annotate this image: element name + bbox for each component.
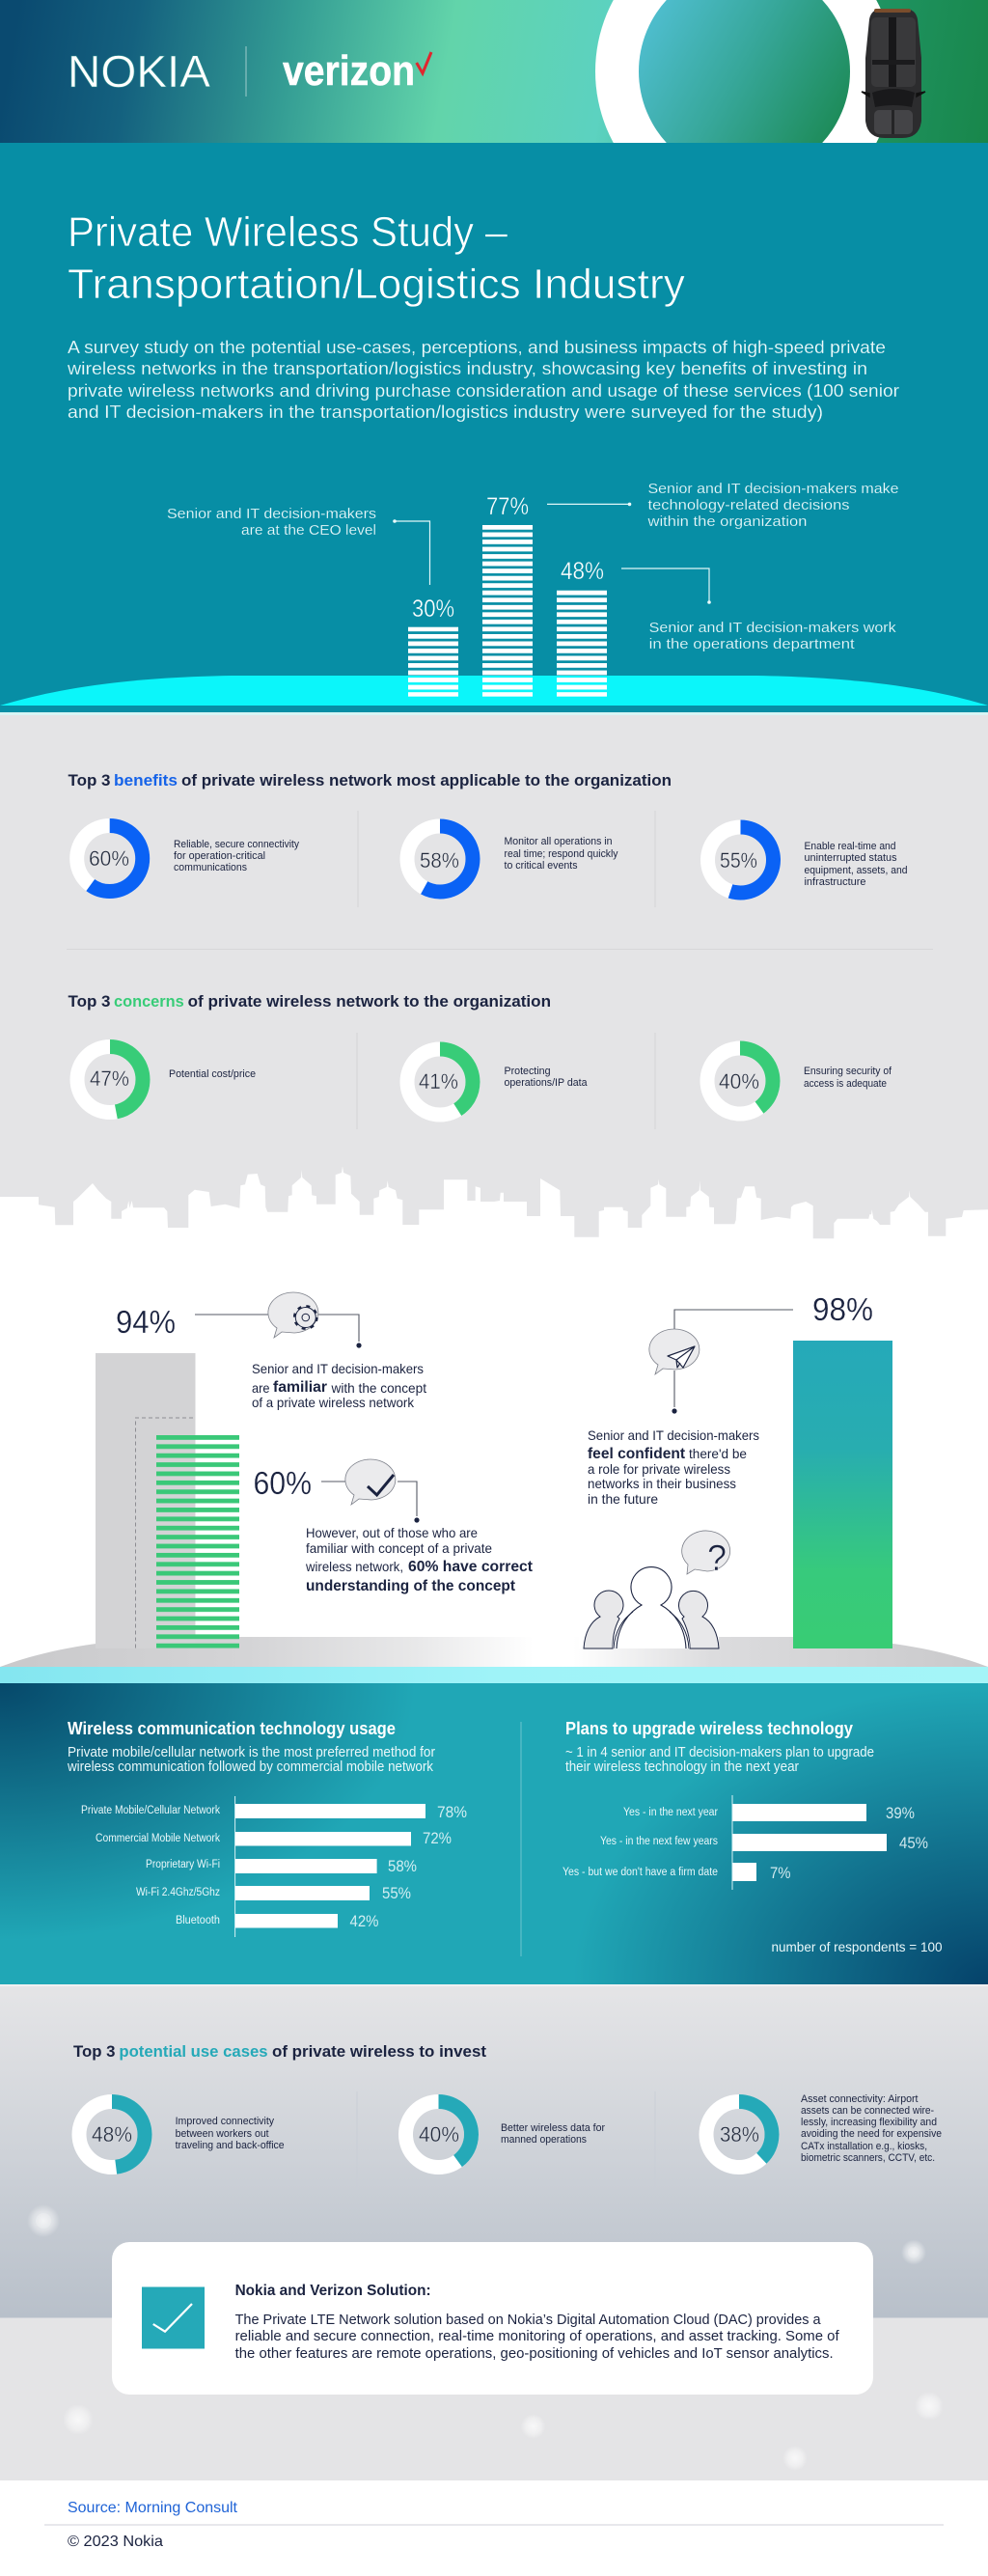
bar chart: technology usage: 72%	[423, 1829, 452, 1847]
text: confident: there'd be	[689, 1446, 747, 1461]
stat: 98%: 98%	[812, 1291, 873, 1327]
donut: 58%	[407, 826, 473, 892]
text: understanding	[305, 1525, 534, 1594]
bar chart: technology usage: 55%	[382, 1884, 411, 1902]
decorative glows	[27, 2204, 944, 2471]
text: cost: Potential cost/price	[169, 1068, 256, 1080]
bar chart: roles: 30%	[412, 596, 454, 623]
text: improved connectivity: traveling and back-office	[176, 2140, 285, 2151]
card text: reliable and secure connection, real-time monitoring of operations, and asset tracking. Some of	[235, 2328, 839, 2344]
card text	[235, 2312, 839, 2362]
callout: technology decisions	[547, 481, 899, 530]
text: understanding: wireless network,	[305, 1559, 403, 1574]
panel: wireless technology charts	[0, 1683, 988, 1984]
heading: upgrade plans	[565, 1719, 874, 1775]
card text: the other features are remote operations, geo-positioning of vehicles and IoT sensor analytics.	[235, 2345, 834, 2362]
text: real-time status: infrastructure	[805, 876, 866, 888]
donut: 40%	[405, 2102, 471, 2168]
bar: 98% confident	[793, 1341, 892, 1648]
callout: CEO level: are at the CEO level	[241, 522, 376, 539]
note: respondents: number of respondents = 100	[772, 1939, 943, 1954]
icon: people with question	[579, 1531, 730, 1648]
panel: use cases and solution	[0, 1984, 988, 2480]
text: reliable connectivity: communications	[174, 862, 247, 873]
callout: technology decisions: Senior and IT decision-makers make	[648, 481, 899, 497]
text: familiar: with the concept	[331, 1380, 426, 1396]
callout: CEO level	[167, 506, 430, 585]
callout: technology decisions: within the organization	[646, 513, 807, 530]
donut: 40%: 40%	[419, 2122, 459, 2147]
text: protecting	[504, 1066, 588, 1089]
bar chart: upgrade plans: Yes - but we don't have a firm date	[563, 1867, 718, 1878]
donut: 38%: 38%	[720, 2122, 759, 2147]
text: asset connectivity: assets can be connected wire-	[801, 2105, 934, 2117]
text: confident	[588, 1427, 759, 1507]
text: understanding: familiar with concept of a private	[306, 1540, 492, 1556]
text: monitor operations: to critical events	[504, 860, 578, 872]
text: security: access is adequate	[804, 1078, 887, 1090]
icon: people with question: ?	[707, 1538, 727, 1579]
text: understanding: However, out of those who are	[306, 1525, 478, 1540]
stat: 60%: 60%	[253, 1465, 312, 1501]
card: solution	[112, 2242, 873, 2395]
donut: 48%: 48%	[92, 2122, 132, 2147]
text: reliable connectivity: for operation-critical	[174, 850, 265, 862]
donut: 41%: 41%	[419, 1069, 458, 1094]
header band	[0, 0, 988, 143]
intro text: and IT decision-makers in the transportation/logistics industry were surveyed for the study)	[68, 402, 823, 422]
text: reliable connectivity	[174, 839, 299, 873]
verizon logo: verizon	[283, 47, 415, 95]
skyline	[0, 1166, 988, 1255]
text: real-time status: Enable real-time and	[805, 841, 895, 852]
bar chart: technology usage: 42%	[349, 1912, 378, 1930]
text: understanding: understanding of the concept	[306, 1578, 516, 1594]
icon: paper plane bubble	[649, 1310, 793, 1414]
bar chart: upgrade plans	[563, 1795, 928, 1890]
bar chart: technology usage: 58%	[388, 1857, 417, 1875]
text: confident: Senior and IT decision-makers	[588, 1427, 759, 1443]
panel: study intro	[0, 143, 988, 715]
text: asset connectivity: avoiding the need for expensive	[801, 2128, 942, 2140]
bar chart: upgrade plans: 39%	[886, 1804, 915, 1822]
bar chart: technology usage	[81, 1796, 467, 1937]
text: improved connectivity: Improved connectivity	[176, 2116, 275, 2127]
donut: 40%	[707, 1048, 773, 1114]
text: familiar: are	[252, 1380, 270, 1396]
text: familiar	[252, 1361, 426, 1410]
heading: technology usage	[67, 1719, 435, 1775]
donut: 60%	[77, 826, 143, 892]
text: monitor operations: real time; respond quickly	[504, 848, 618, 860]
text: familiar: familiar	[273, 1379, 327, 1396]
text: security: Ensuring security of	[804, 1066, 892, 1077]
text: reliable connectivity: Reliable, secure connectivity	[174, 839, 299, 850]
bar chart: technology usage: 78%	[437, 1803, 467, 1821]
intro text: A survey study on the potential use-cases, perceptions, and business impacts of high-speed private	[68, 338, 886, 357]
bar chart: roles	[408, 493, 607, 697]
bar chart: upgrade plans: 45%	[899, 1834, 928, 1852]
title: Private Wireless Study –	[68, 208, 508, 256]
donut: 60%: 60%	[89, 846, 129, 871]
donut: 55%	[708, 827, 774, 893]
text: better wireless data: Better wireless data for	[501, 2122, 605, 2134]
cyan dome	[0, 676, 988, 706]
donut: 58%: 58%	[420, 848, 459, 873]
text: understanding: 60% have correct	[408, 1559, 534, 1575]
bar chart: roles: 48%	[561, 558, 604, 585]
text: monitor operations	[504, 836, 618, 872]
intro text	[67, 338, 899, 422]
panel: familiarity and confidence	[0, 1245, 988, 1683]
text: security	[804, 1066, 892, 1090]
bar: 60% understanding	[135, 1418, 239, 1648]
heading: use cases: Top 3	[73, 2042, 116, 2061]
callout: operations department	[621, 568, 896, 652]
text: familiar: of a private wireless network	[252, 1395, 415, 1410]
intro text: private wireless networks and driving purchase consideration and usage of these services (100 senior	[68, 381, 899, 401]
copyright: © 2023 Nokia	[68, 2534, 163, 2550]
text: real-time status: equipment, assets, and	[805, 865, 907, 876]
heading: use cases: potential use cases	[119, 2042, 268, 2061]
heading: benefits: Top 3	[68, 771, 110, 789]
bar chart: upgrade plans: Yes - in the next year	[623, 1807, 718, 1818]
card heading: Nokia and Verizon Solution:	[235, 2283, 431, 2299]
text: asset connectivity: Asset connectivity: Airport	[801, 2093, 919, 2105]
donut: 55%: 55%	[720, 848, 757, 873]
text: familiar: Senior and IT decision-makers	[252, 1361, 424, 1376]
text: confident: networks in their business	[588, 1476, 736, 1491]
heading: technology usage: Private mobile/cellular network is the most preferred method for	[68, 1745, 435, 1760]
title: Transportation/Logistics Industry	[68, 261, 685, 308]
panel: benefits and concerns	[0, 715, 988, 1246]
bar chart: roles: 77%	[486, 493, 529, 520]
bar chart: upgrade plans: Yes - in the next few years	[600, 1836, 718, 1847]
source: Source: Morning Consult	[68, 2500, 238, 2516]
text: confident: a role for private wireless	[588, 1461, 730, 1477]
heading: benefits: of private wireless network most applicable to the organization	[181, 771, 672, 789]
callout: operations department: Senior and IT decision-makers work	[649, 620, 896, 636]
heading: use cases	[73, 2042, 486, 2061]
heading: technology usage: Wireless communication technology usage	[68, 1719, 396, 1738]
card text: The Private LTE Network solution based on Nokia’s Digital Automation Cloud (DAC) provides a	[235, 2312, 821, 2328]
stat: 94%: 94%	[116, 1304, 176, 1340]
heading: upgrade plans: Plans to upgrade wireless technology	[565, 1719, 853, 1738]
logo divider	[245, 46, 247, 97]
heading: upgrade plans: their wireless technology in the next year	[565, 1759, 799, 1775]
bar chart: technology usage: Private Mobile/Cellular Network	[81, 1805, 220, 1816]
bar chart: technology usage: Proprietary Wi-Fi	[146, 1859, 220, 1870]
text: real-time status	[805, 841, 907, 888]
text: asset connectivity: lessly, increasing flexibility and	[801, 2117, 937, 2128]
bar chart: technology usage: Commercial Mobile Network	[96, 1833, 220, 1844]
bar chart: technology usage: Bluetooth	[176, 1915, 220, 1926]
bar chart: technology usage: Wi-Fi 2.4Ghz/5Ghz	[136, 1887, 220, 1898]
donut: 47%: 47%	[90, 1066, 129, 1091]
ring graphic	[595, 0, 881, 143]
heading: use cases: of private wireless to invest	[272, 2042, 486, 2061]
heading: technology usage: wireless communication followed by commercial mobile network	[67, 1759, 434, 1775]
callout: technology decisions: technology-related decisions	[648, 497, 849, 513]
donut: 47%	[77, 1046, 143, 1112]
intro text: wireless networks in the transportation/logistics industry, showcasing key benefits of investing in	[67, 359, 867, 378]
text: asset connectivity: biometric scanners, CCTV, etc.	[801, 2152, 935, 2164]
icon: check box	[142, 2287, 205, 2349]
text: improved connectivity: between workers out	[176, 2128, 269, 2140]
donut: 38%	[706, 2102, 772, 2168]
footer	[0, 2480, 988, 2576]
heading: concerns: of private wireless network to the organization	[188, 992, 551, 1011]
heading: upgrade plans: ~ 1 in 4 senior and IT decision-makers plan to upgrade	[565, 1745, 874, 1760]
heading: benefits: benefits	[114, 771, 178, 789]
heading: concerns: Top 3	[68, 992, 110, 1011]
callout: CEO level: Senior and IT decision-makers	[167, 506, 376, 522]
text: monitor operations: Monitor all operations in	[504, 836, 612, 847]
donut: 48%	[79, 2102, 145, 2168]
text: protecting: Protecting	[504, 1066, 550, 1077]
text: real-time status: uninterrupted status	[805, 852, 897, 864]
title	[68, 208, 685, 308]
text: protecting: operations/IP data	[504, 1077, 588, 1089]
callout: operations department: in the operations department	[649, 636, 856, 652]
text: better wireless data	[501, 2122, 605, 2146]
Nokia logo: NOKIA	[68, 46, 210, 97]
floor	[0, 1637, 988, 1667]
text: confident: in the future	[588, 1491, 658, 1507]
donut: 40%: 40%	[719, 1069, 759, 1094]
text: asset connectivity	[801, 2093, 942, 2164]
icon: gear bubble	[195, 1292, 362, 1348]
text: improved connectivity	[176, 2116, 285, 2151]
text: confident: feel confident	[588, 1446, 686, 1462]
bar chart: upgrade plans: 7%	[770, 1864, 791, 1882]
icon: check bubble	[321, 1459, 420, 1523]
icon: car top view	[862, 9, 925, 138]
heading: concerns: concerns	[114, 992, 184, 1011]
text: better wireless data: manned operations	[501, 2134, 587, 2146]
bar: 94% familiar	[96, 1353, 195, 1648]
text: asset connectivity: CATx installation e.g., kiosks,	[801, 2141, 927, 2152]
donut: 41%	[407, 1049, 473, 1115]
